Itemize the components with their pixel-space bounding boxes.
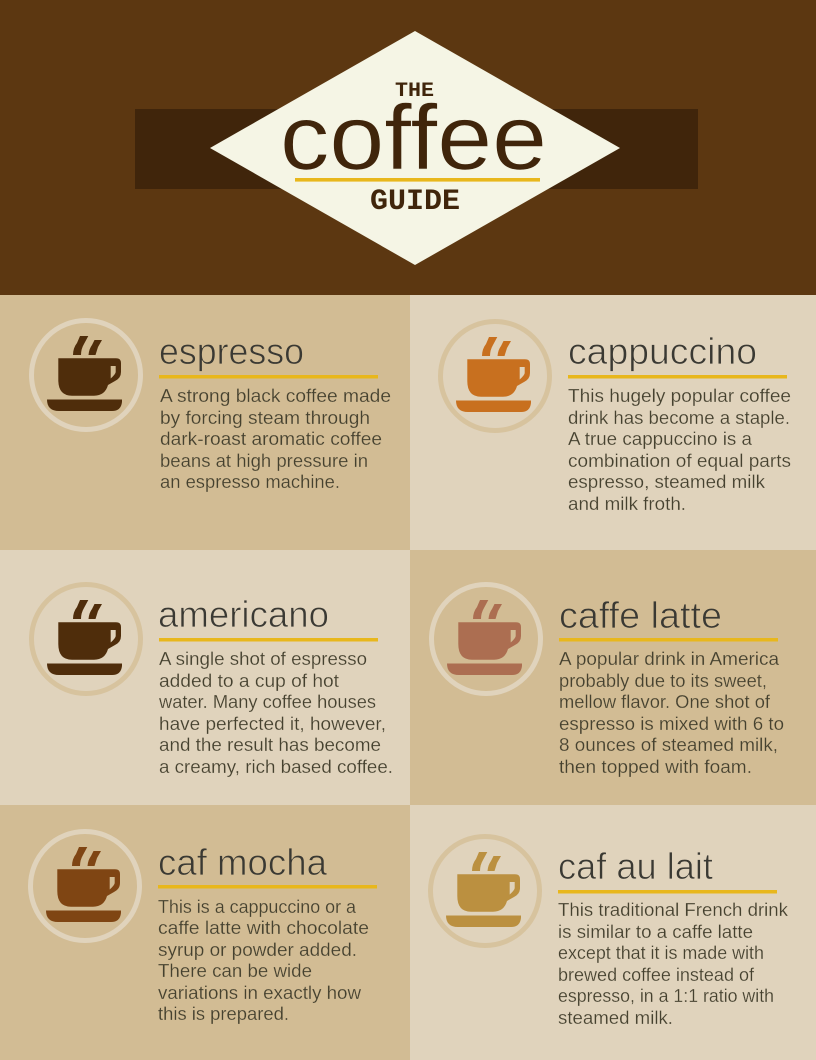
panel: caffe latte bbox=[410, 550, 816, 805]
caf au lait description: brewed coffee instead of bbox=[558, 965, 755, 985]
cappuccino description bbox=[568, 386, 791, 514]
cappuccino description: espresso, steamed milk bbox=[568, 472, 766, 492]
americano description: water. Many coffee houses bbox=[158, 692, 376, 712]
cappuccino description: and milk froth. bbox=[568, 494, 686, 514]
americano description: added to a cup of hot bbox=[159, 671, 339, 691]
header banner bbox=[0, 0, 816, 295]
espresso description bbox=[160, 386, 391, 492]
title: the: THE bbox=[395, 80, 434, 103]
diamond badge bbox=[210, 31, 620, 265]
caffe latte description: espresso is mixed with 6 to bbox=[559, 714, 784, 734]
caf mocha description: this is prepared. bbox=[158, 1004, 289, 1024]
panel: espresso bbox=[0, 295, 410, 550]
americano description: a creamy, rich based coffee. bbox=[159, 757, 393, 777]
caf au lait description bbox=[558, 900, 789, 1028]
panel: cappuccino bbox=[410, 295, 816, 550]
caf au lait description: except that it is made with bbox=[558, 943, 764, 963]
caf mocha heading: caf mocha bbox=[158, 842, 327, 883]
caffe latte background bbox=[410, 550, 816, 805]
cappuccino background bbox=[410, 295, 816, 550]
espresso description: dark-roast aromatic coffee bbox=[160, 429, 382, 449]
title: guide: GUIDE bbox=[370, 185, 460, 219]
caf mocha description bbox=[158, 897, 369, 1024]
americano description: A single shot of espresso bbox=[159, 649, 367, 669]
cappuccino description: drink has become a staple. bbox=[568, 408, 790, 428]
header background bbox=[0, 0, 816, 295]
caf au lait heading: caf au lait bbox=[558, 846, 714, 887]
cappuccino heading: cappuccino bbox=[568, 331, 757, 372]
caf mocha description: This is a cappuccino or a bbox=[158, 897, 357, 917]
caffe latte description: mellow flavor. One shot of bbox=[559, 692, 771, 712]
panel: caf au lait bbox=[410, 805, 816, 1060]
icon: espresso cup bbox=[32, 320, 140, 430]
cappuccino description: A true cappuccino is a bbox=[568, 429, 753, 449]
caffe latte description: A popular drink in America bbox=[559, 649, 780, 669]
title: coffee: coffee bbox=[280, 87, 547, 189]
espresso description: A strong black coffee made bbox=[160, 386, 391, 406]
caf au lait background bbox=[410, 805, 816, 1060]
espresso description: by forcing steam through bbox=[160, 408, 370, 428]
icon: caf au lait cup bbox=[430, 836, 540, 946]
caffe latte description: 8 ounces of steamed milk, bbox=[559, 735, 778, 755]
americano description bbox=[158, 649, 393, 777]
caffe latte description: then topped with foam. bbox=[559, 757, 752, 777]
espresso underline bbox=[159, 375, 378, 378]
caf au lait description: is similar to a caffe latte bbox=[558, 922, 753, 942]
caffe latte description: probably due to its sweet, bbox=[559, 671, 767, 691]
panel: caf mocha bbox=[0, 805, 410, 1060]
caf au lait description: steamed milk. bbox=[558, 1008, 673, 1028]
dark ribbon bar bbox=[135, 109, 698, 189]
espresso background bbox=[0, 295, 410, 550]
panel: americano bbox=[0, 550, 410, 805]
caf au lait description: espresso, in a 1:1 ratio with bbox=[558, 986, 774, 1006]
caf mocha description: caffe latte with chocolate bbox=[158, 918, 369, 938]
caf au lait description: This traditional French drink bbox=[558, 900, 789, 920]
caf au lait underline bbox=[558, 890, 777, 894]
caf mocha underline bbox=[158, 885, 377, 888]
americano background bbox=[0, 550, 410, 805]
americano description: have perfected it, however, bbox=[159, 714, 386, 734]
caffe latte description bbox=[559, 649, 784, 777]
espresso description: beans at high pressure in bbox=[160, 451, 368, 471]
caffe latte underline bbox=[559, 638, 778, 642]
caffe latte heading: caffe latte bbox=[559, 595, 722, 636]
caf mocha description: variations in exactly how bbox=[158, 983, 362, 1003]
caf mocha description: There can be wide bbox=[158, 961, 312, 981]
americano underline bbox=[159, 638, 378, 642]
title underline bbox=[295, 178, 540, 182]
espresso description: an espresso machine. bbox=[160, 472, 340, 492]
caf mocha description: syrup or powder added. bbox=[158, 940, 357, 960]
americano description: and the result has become bbox=[159, 735, 381, 755]
caf mocha background bbox=[0, 805, 410, 1060]
icon: caffe latte cup bbox=[432, 584, 540, 694]
americano heading: americano bbox=[158, 594, 329, 635]
cappuccino description: This hugely popular coffee bbox=[568, 386, 791, 406]
icon: caf mocha cup bbox=[30, 832, 140, 940]
espresso heading: espresso bbox=[159, 331, 304, 372]
icon: cappuccino cup bbox=[440, 322, 550, 430]
cappuccino description: combination of equal parts bbox=[568, 451, 791, 471]
icon: americano cup bbox=[32, 584, 140, 694]
cappuccino underline bbox=[568, 375, 787, 378]
